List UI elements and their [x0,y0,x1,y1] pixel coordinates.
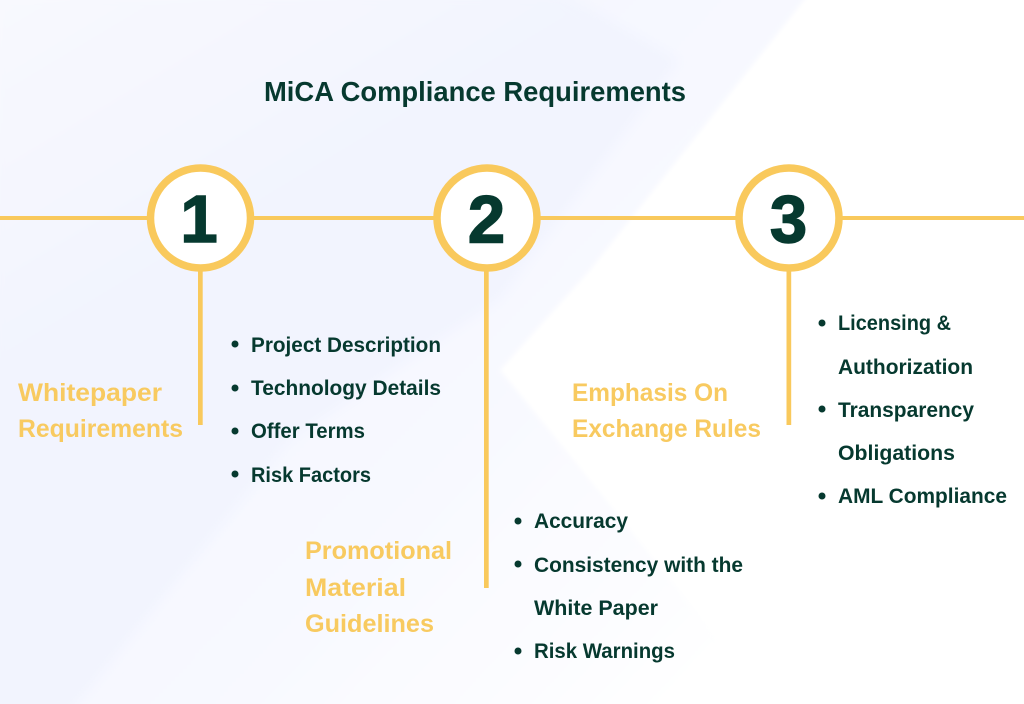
connector 3 [786,265,791,425]
connector 1 [198,265,203,425]
list: exchange items: Obligations [838,442,955,465]
number 1: 1 [180,182,218,257]
heading: promotional material guidelines: Material [305,574,406,602]
heading: promotional material guidelines: Guidelines [305,610,434,638]
list: exchange items: Transparency [838,399,974,422]
list: promotional items: Consistency with the [534,554,743,577]
list: exchange items: AML Compliance [838,485,1007,508]
heading: promotional material guidelines [305,537,452,638]
circle 1 [150,168,250,268]
circle 3 [739,168,839,268]
heading: emphasis on exchange rules [572,379,761,443]
list: promotional items: Accuracy [534,510,628,533]
list: promotional items: White Paper [534,597,658,620]
background diagonal panel [0,0,812,704]
list: whitepaper items: Offer Terms [251,420,365,443]
step 1 [18,168,441,487]
list: whitepaper items [232,334,441,487]
list: whitepaper items: Project Description [251,334,441,357]
heading: promotional material guidelines: Promotional [305,537,452,565]
heading: emphasis on exchange rules: Emphasis On [572,379,728,407]
circle 2 [437,168,537,268]
list: promotional items [514,510,743,663]
list: exchange items: Authorization [838,356,973,379]
heading: whitepaper requirements: Whitepaper [18,379,162,407]
timeline line [0,216,1024,220]
step 2 [305,168,743,663]
number 2: 2 [468,182,505,258]
heading: whitepaper requirements [18,379,183,443]
heading: whitepaper requirements: Requirements [18,415,183,443]
list: exchange items: Licensing & [838,312,951,335]
step 3 [572,168,1007,508]
list: exchange items [818,312,1007,508]
list: whitepaper items: Risk Factors [251,464,371,487]
list: whitepaper items: Technology Details [251,377,441,400]
list: promotional items: Risk Warnings [534,640,675,663]
heading: emphasis on exchange rules: Exchange Rules [572,415,761,443]
number 3: 3 [770,182,807,258]
connector 2 [484,265,489,588]
title: MiCA Compliance Requirements [264,76,686,107]
